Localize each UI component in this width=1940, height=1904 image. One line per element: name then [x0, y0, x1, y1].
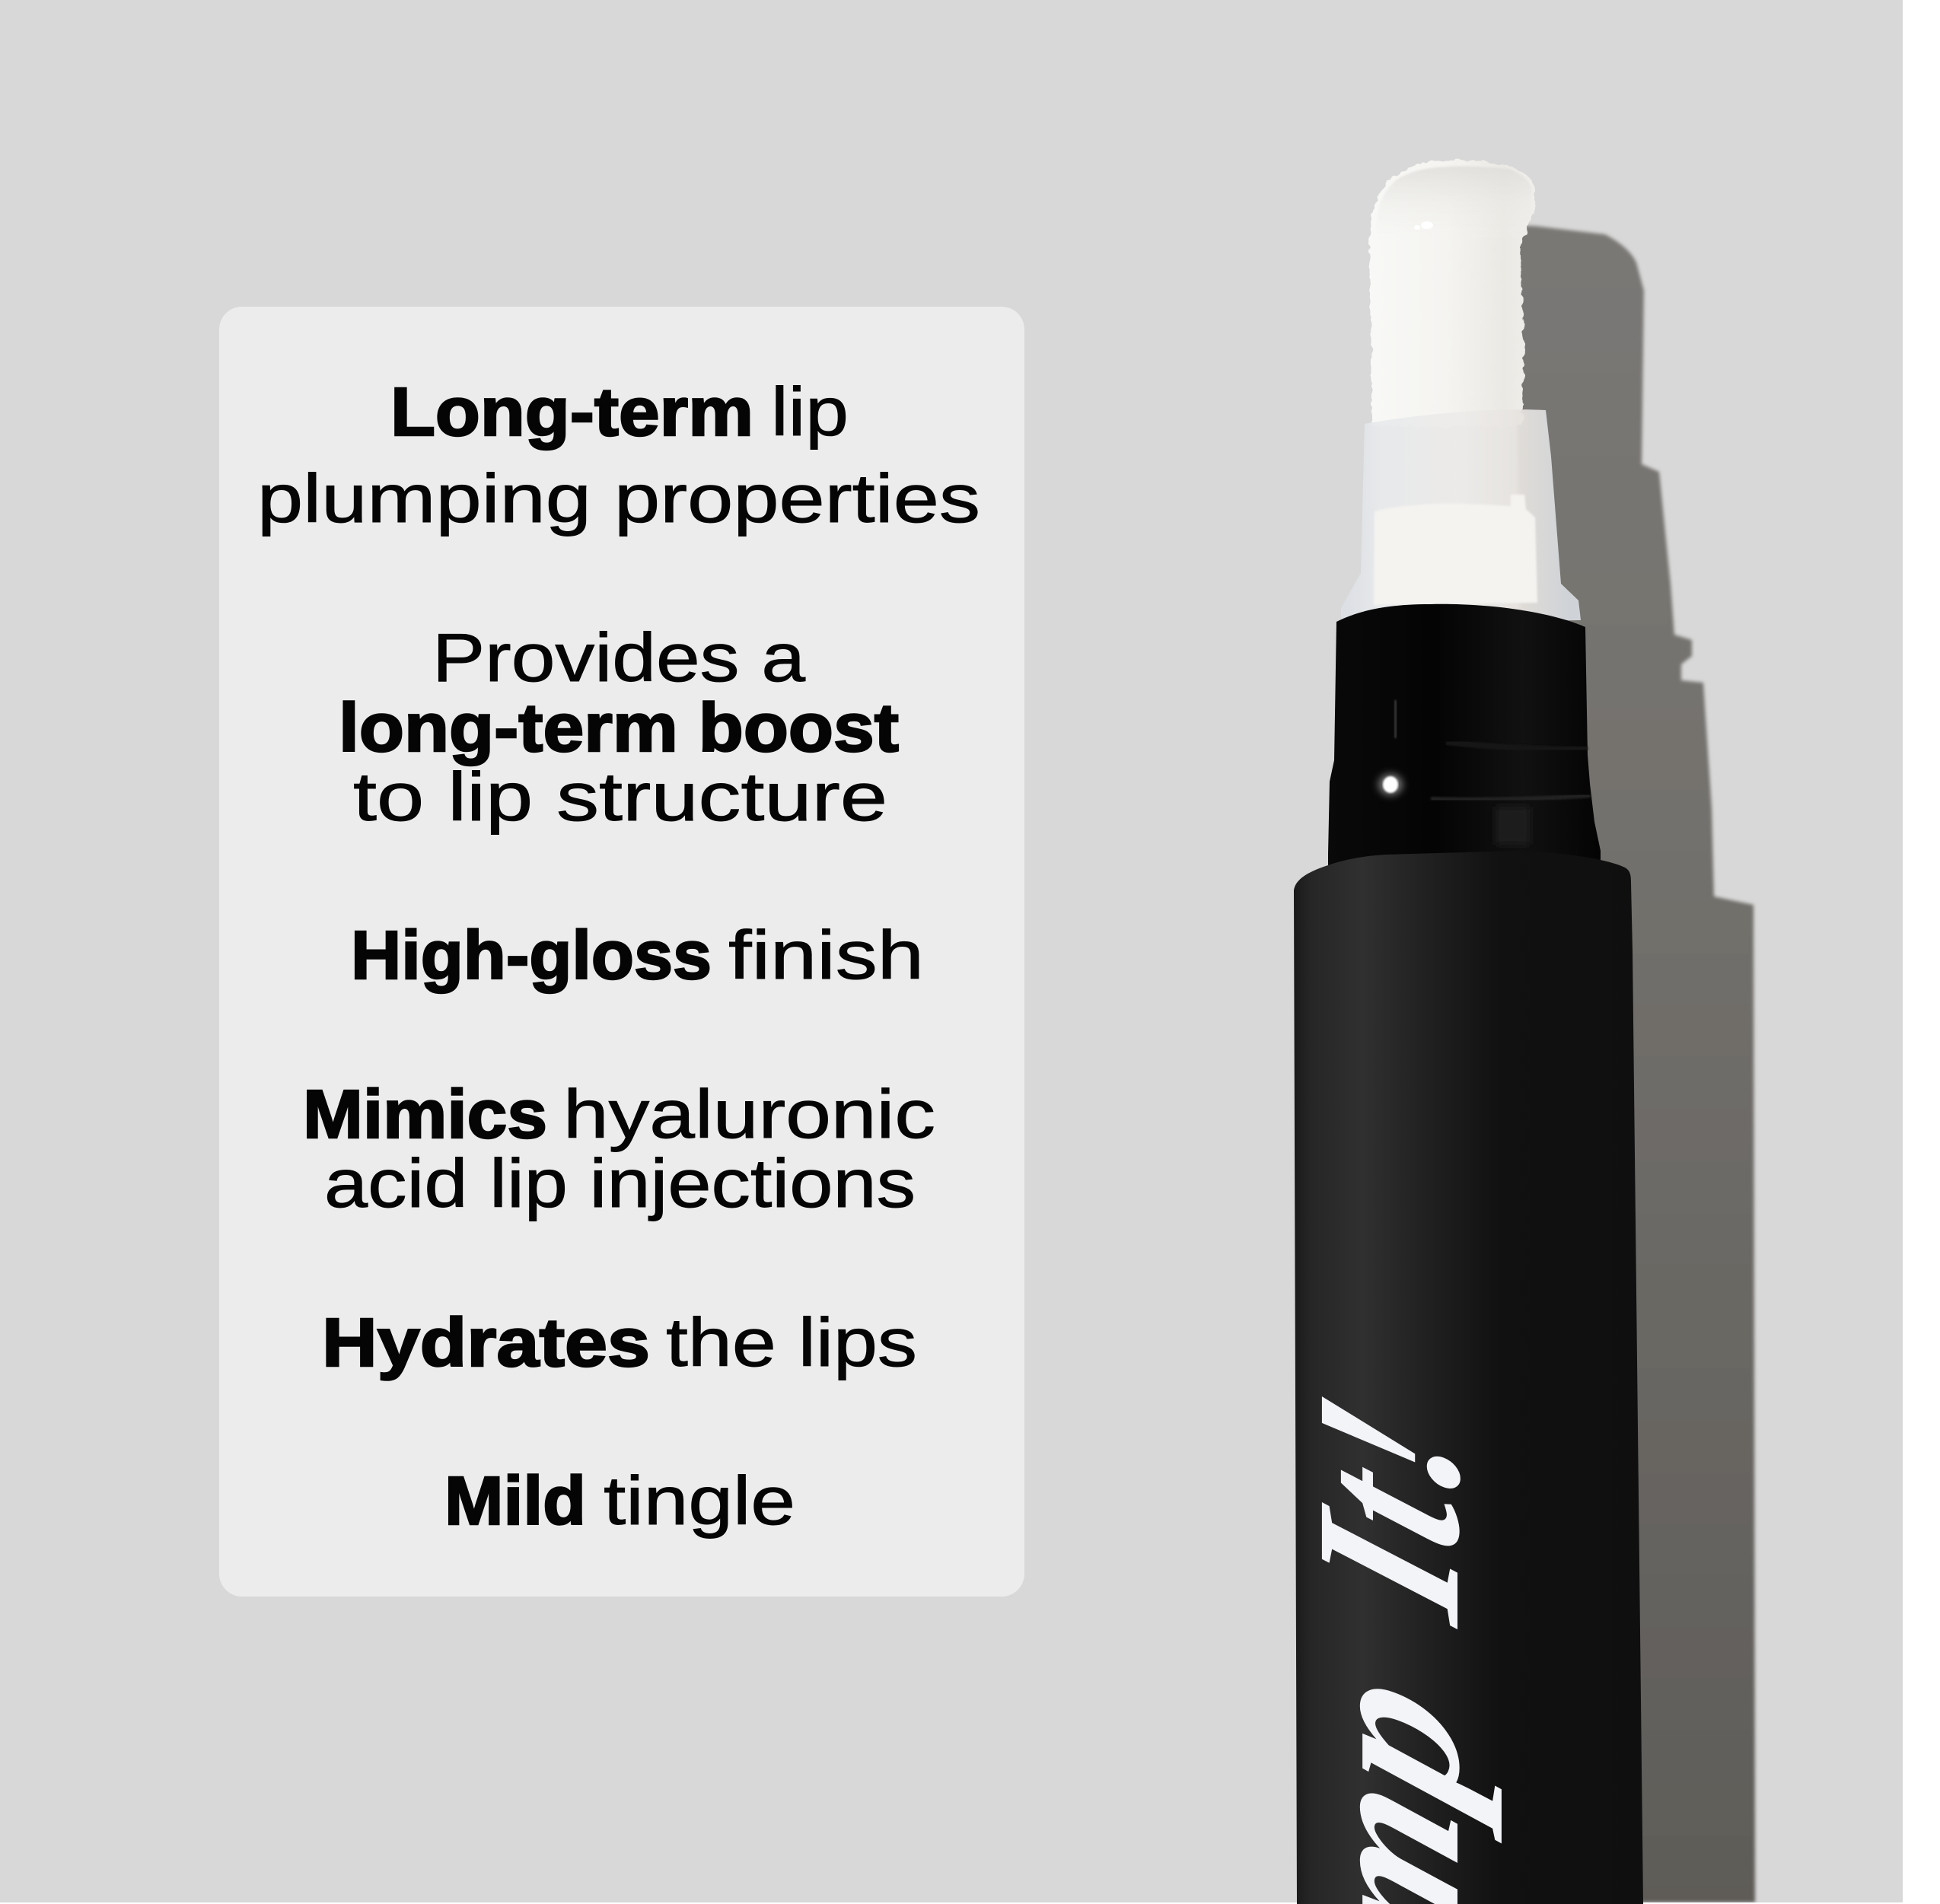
clear sleeve — [1341, 409, 1581, 624]
white applicator base — [1374, 495, 1537, 605]
benefit: hydrates the lips: Hydrates — [322, 1305, 650, 1381]
benefit: mimics hyaluronic acid lip injections: Mimics — [303, 1077, 547, 1153]
benefits card — [219, 307, 1024, 1597]
benefit: provides a long-term boost to lip structure: to lip structure — [353, 759, 887, 836]
benefit: mild tingle: Mild — [444, 1463, 586, 1539]
benefit: mimics hyaluronic acid lip injections — [303, 1077, 935, 1222]
card background — [219, 307, 1024, 1597]
benefit: mild tingle: tingle — [604, 1463, 795, 1539]
benefit: long-term lip plumping properties: Long-term — [390, 374, 753, 451]
cast shadow of pen — [1515, 225, 1755, 1902]
benefit: long-term lip plumping properties: plumping properties — [257, 461, 980, 537]
benefit: provides a long-term boost to lip structure: Provides a — [432, 620, 806, 696]
benefit: mimics hyaluronic acid lip injections: acid lip injections — [324, 1146, 916, 1222]
applicator foam tip — [1369, 160, 1535, 426]
pen barrel lettering: Plump It!: It! — [1273, 1368, 1502, 1647]
black collar — [1328, 604, 1601, 868]
matte pen barrel — [1294, 851, 1643, 1904]
benefit: mimics hyaluronic acid lip injections: hyaluronic — [563, 1077, 935, 1153]
benefit: hydrates the lips — [322, 1305, 917, 1381]
benefit: provides a long-term boost to lip structure: long-term boost — [339, 690, 899, 766]
collar ridge highlights — [1378, 700, 1591, 845]
benefit: provides a long-term boost to lip structure — [339, 620, 899, 836]
white page margin — [1643, 0, 1940, 1904]
benefit: high-gloss finish — [351, 918, 924, 994]
benefit: long-term lip plumping properties: lip — [771, 374, 849, 451]
pen barrel lettering: Plump It! — [1321, 1396, 1502, 1904]
benefit: hydrates the lips: the lips — [666, 1305, 917, 1381]
product photo: lip plumper pen — [1273, 160, 1755, 1904]
benefit: mild tingle — [444, 1463, 795, 1539]
benefit: high-gloss finish: High-gloss — [351, 918, 712, 994]
benefit: long-term lip plumping properties — [257, 374, 980, 537]
glossy highlight on tip — [1414, 221, 1433, 230]
benefit: high-gloss finish: finish — [728, 918, 924, 994]
